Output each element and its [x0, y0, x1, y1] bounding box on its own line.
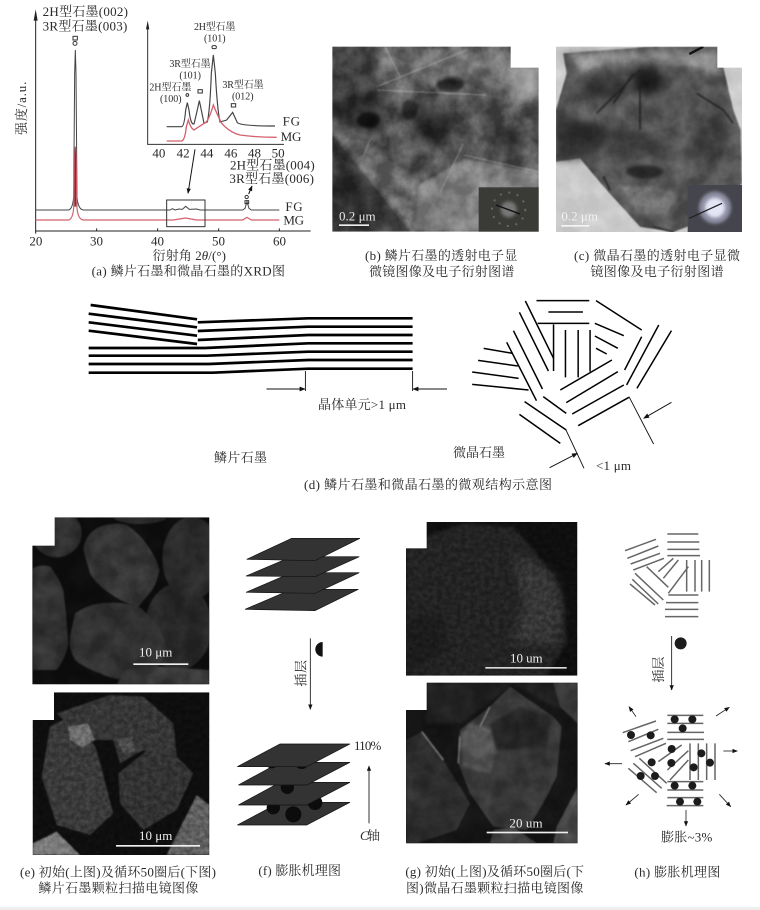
scale bar e1: 10 μm	[139, 645, 172, 660]
caption e: 鳞片石墨颗粒扫描电镜图像	[38, 881, 198, 896]
SEM photo initial	[32, 517, 210, 684]
flake graphite layers	[89, 305, 413, 373]
inset FG and MG labels	[281, 113, 301, 144]
microcrystalline graphite label: 微晶石墨	[453, 445, 505, 460]
MG curve	[36, 147, 279, 220]
arrow from box to inset	[188, 149, 195, 193]
SEM photo after cycling	[33, 692, 209, 855]
diffraction inset b	[479, 187, 539, 232]
stacked sheets before	[245, 538, 360, 611]
caption e: (e) 初始(上图)及循环50圈后(下图)	[20, 865, 216, 880]
scale bar e2: 10 μm	[139, 828, 172, 843]
caption g	[405, 864, 584, 896]
main peak labels	[43, 4, 128, 34]
scale bar g1	[485, 651, 567, 669]
main peak markers	[73, 36, 77, 45]
microcrystalline graphite layers	[472, 301, 671, 443]
inset peak labels: (100)	[160, 94, 182, 105]
inset FG and MG labels: MG	[281, 129, 301, 144]
TEM photo c	[556, 47, 742, 232]
inset peak labels	[149, 20, 264, 105]
stacked sheets after	[237, 744, 350, 825]
FG and MG labels: FG	[285, 199, 303, 214]
crystallite layers before	[625, 534, 709, 617]
expansion percent: 110%	[354, 738, 382, 753]
scale bar g1: 10 um	[510, 651, 543, 666]
selection box	[167, 200, 205, 227]
caption c	[574, 248, 740, 279]
SEM photo after cycling	[406, 683, 578, 843]
x axis tick labels: 50	[212, 234, 225, 249]
crystallite layers after	[623, 715, 715, 806]
SEM photo initial	[406, 522, 577, 676]
inset tick labels: 42	[177, 145, 190, 160]
caption c: (c) 微晶石墨的透射电子显微	[574, 248, 740, 263]
c axis label: C轴	[360, 828, 380, 843]
right peak labels: 2H型石墨(004)	[230, 158, 315, 173]
inset tick labels: 46	[224, 145, 238, 160]
inset peak labels: 3R型石墨	[169, 57, 211, 70]
caption d: (d) 鳞片石墨和微晶石墨的微观结构示意图	[304, 477, 552, 492]
caption c: 镜图像及电子衍射图谱	[590, 264, 724, 279]
scale bar e1	[133, 645, 188, 665]
caption b	[365, 248, 517, 279]
FG and MG labels: MG	[283, 213, 304, 228]
panel h: expansion mechanism microcrystal	[605, 534, 737, 880]
panel a: XRD chart	[14, 4, 315, 279]
panel e: SEM of flake graphite	[20, 509, 221, 896]
panel b: TEM image of flake graphite	[332, 46, 539, 279]
panel f: expansion mechanism flake	[237, 538, 382, 878]
inset peak labels: (101)	[179, 71, 201, 82]
y axis title: 强度/a.u.	[14, 82, 29, 135]
scale bar b: 0.2 μm	[339, 209, 376, 224]
TEM photo b	[332, 47, 539, 232]
inset peak labels: 2H型石墨	[149, 80, 191, 93]
crystal unit dimension arrows	[266, 371, 447, 391]
white notch e2	[32, 692, 54, 720]
caption g: 图)微晶石墨颗粒扫描电镜图像	[406, 881, 583, 896]
intercalant circle	[675, 637, 687, 649]
scale bar c: 0.2 μm	[561, 209, 598, 224]
x axis tick labels	[29, 234, 286, 249]
panel d: microstructure schematic	[89, 301, 672, 492]
inset peak labels: 3R型石墨	[222, 78, 264, 91]
intercalant half circle	[315, 642, 323, 657]
panel c: TEM image of microcrystalline graphite	[556, 46, 743, 279]
white notch c	[717, 46, 743, 68]
panel g: SEM of microcrystalline graphite	[405, 521, 584, 896]
inset tick labels	[152, 145, 285, 160]
insertion arrow	[670, 636, 673, 690]
caption g: (g) 初始(上图)及循环50圈后(下	[405, 864, 584, 879]
inset MG curve	[167, 105, 277, 141]
FG and MG labels	[283, 199, 304, 228]
caption b: 微镜图像及电子衍射图谱	[369, 264, 514, 279]
inset markers	[186, 46, 236, 107]
inset tick labels: 48	[248, 145, 261, 160]
caption e	[20, 865, 216, 896]
white notch e1	[32, 517, 55, 546]
inset chart	[146, 20, 301, 160]
diffraction inset c	[688, 185, 742, 232]
c axis arrow	[367, 766, 370, 823]
scale bar g2	[487, 815, 568, 833]
inset tick labels: 40	[152, 145, 165, 160]
inset peak labels: (012)	[232, 91, 254, 102]
main chart axes	[34, 9, 311, 234]
size label: <1 μm	[596, 458, 631, 473]
inset tick labels: 44	[200, 145, 214, 160]
scale bar g2: 20 um	[509, 815, 543, 830]
insertion arrow	[309, 638, 312, 709]
white notch g1	[405, 521, 427, 548]
caption h: (h) 膨胀机理图	[634, 865, 720, 880]
insertion label: 插层	[293, 660, 308, 687]
FG curve	[36, 50, 279, 210]
right peak labels	[229, 158, 315, 186]
inset FG and MG labels: FG	[283, 113, 300, 128]
scale bar e2	[116, 828, 200, 847]
insertion label: 插层	[651, 657, 666, 683]
inset peak labels: (101)	[204, 34, 226, 45]
inset axes	[148, 24, 284, 144]
x axis tick labels: 60	[273, 234, 286, 249]
size dimension arrows	[550, 397, 672, 468]
right peak labels: 3R型石墨(006)	[229, 171, 314, 186]
x axis tick labels: 30	[90, 234, 103, 249]
main peak labels: 3R型石墨(003)	[43, 19, 127, 34]
expansion label: 膨胀~3%	[661, 830, 713, 845]
x axis tick labels: 40	[151, 234, 164, 249]
expansion arrows	[605, 707, 737, 826]
crystal unit label: 晶体单元>1 μm	[318, 397, 406, 412]
x axis title: 衍射角 2θ/(°)	[153, 248, 226, 263]
inset FG curve	[167, 55, 275, 127]
caption b: (b) 鳞片石墨的透射电子显	[365, 248, 517, 263]
inset tick labels: 50	[272, 145, 285, 160]
white notch g2	[405, 682, 427, 710]
caption f: (f) 膨胀机理图	[258, 863, 341, 878]
main peak labels: 2H型石墨(002)	[43, 4, 128, 19]
caption a: (a) 鳞片石墨和微晶石墨的XRD图	[92, 264, 285, 279]
flake graphite label: 鳞片石墨	[214, 450, 267, 465]
white notch b	[511, 46, 539, 68]
right peak markers	[245, 186, 252, 204]
x axis tick labels: 20	[29, 234, 42, 249]
inset peak labels: 2H型石墨	[194, 20, 235, 33]
